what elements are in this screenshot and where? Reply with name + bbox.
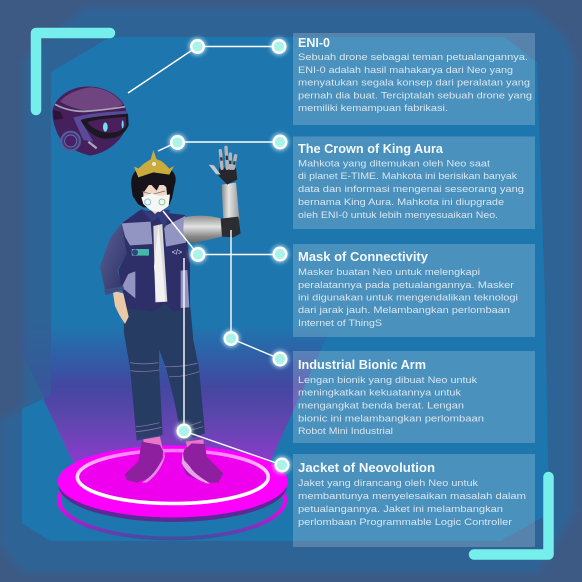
- panel: Jacket of Neovolution: [293, 454, 535, 547]
- node markers: [169, 38, 290, 474]
- connector lines: [128, 46, 282, 465]
- text block: mask description: [298, 266, 518, 328]
- text block: crown description: bernama King Aura. Mahkota ini diupgrade: [298, 196, 504, 207]
- panel: ENI-0: [293, 33, 535, 125]
- corner bracket bottom-right: [474, 477, 548, 554]
- text block: arm description: mengangkat benda berat. Lengan: [298, 400, 464, 410]
- text block: ENI-0 description: Sebuah drone sebagai teman petualangannya.: [298, 51, 528, 62]
- text block: mask description: Masker buatan Neo untuk melengkapi: [298, 266, 480, 277]
- jacket: </>: [172, 248, 182, 257]
- text block: arm description: Robot Mini Industrial: [298, 425, 393, 436]
- panel: The Crown of King Aura: [293, 136, 535, 229]
- jacket: [100, 208, 190, 324]
- corner bracket top-left: [36, 33, 110, 110]
- mask: [141, 193, 170, 212]
- text block: crown description: oleh ENI-0 untuk lebih menyesuaikan Neo.: [298, 209, 498, 220]
- crown: [134, 150, 174, 177]
- shoes: [125, 437, 223, 483]
- text block: ENI-0 description: menyatukan segala konsep dari peralatan yang: [298, 76, 530, 88]
- spotlight glow on side band: [0, 300, 51, 412]
- text block: crown description: [298, 158, 524, 220]
- legs: [123, 303, 205, 442]
- text block: jacket description: Jaket yang dirancang oleh Neo untuk: [298, 477, 478, 488]
- text block: jacket description: perlombaan Programmable Logic Controller: [298, 516, 512, 527]
- icon: drone ENI-0: [52, 87, 129, 156]
- platform: [58, 446, 288, 538]
- text block: ENI-0 description: ENI-0 adalah hasil mahakarya dari Neo yang: [298, 64, 513, 75]
- text block: crown description: Mahkota yang ditemukan oleh Neo saat: [298, 158, 490, 168]
- text block: jacket description: [298, 477, 526, 527]
- text block: arm description: bionic ini melambangkan perlombaan: [298, 412, 484, 424]
- text block: mask description: dari jarak jauh. Melambangkan perlombaan: [298, 304, 510, 315]
- head: [131, 150, 176, 214]
- text block: ENI-0 description: [298, 51, 532, 113]
- text block: arm description: meningkatkan kekuatannya untuk: [298, 386, 461, 398]
- text block: crown description: di planet E-TIME. Mahkota ini berisikan banyak: [298, 170, 517, 181]
- panel: Industrial Bionic Arm: [293, 351, 535, 443]
- heading: Mask of Connectivity: Mask of Connectivity: [298, 250, 428, 264]
- text block: ENI-0 description: pernah dia buat. Terciptalah sebuah drone yang: [298, 90, 532, 100]
- text block: arm description: Lengan bionik yang dibuat Neo untuk: [298, 374, 477, 385]
- bionic arm: [183, 147, 241, 243]
- figure: Neo character: [100, 147, 241, 483]
- text block: ENI-0 description: memiliki kemampuan fabrikasi.: [298, 102, 448, 113]
- heading: The Crown of King Aura: The Crown of King Aura: [298, 142, 444, 156]
- heading: Jacket of Neovolution: Jacket of Neovolution: [298, 461, 435, 475]
- text block: mask description: Internet of ThingS: [298, 317, 382, 328]
- text block: jacket description: membantunya menyelesaikan masalah dalam: [298, 490, 526, 501]
- text block: mask description: peralatannya pada petualangannya. Masker: [298, 279, 514, 290]
- heading: ENI-0: ENI-0: [298, 36, 330, 50]
- heading: Industrial Bionic Arm: Industrial Bionic Arm: [298, 358, 426, 372]
- text block: crown description: data dan informasi mengenai seseorang yang: [298, 183, 524, 194]
- text block: mask description: ini digunakan untuk mengendalikan teknologi: [298, 292, 518, 302]
- panel: Mask of Connectivity: [293, 244, 535, 337]
- text block: arm description: [298, 374, 484, 436]
- text block: jacket description: petualangannya. Jaket ini melambangkan: [298, 503, 503, 514]
- spotlight: [43, 336, 326, 462]
